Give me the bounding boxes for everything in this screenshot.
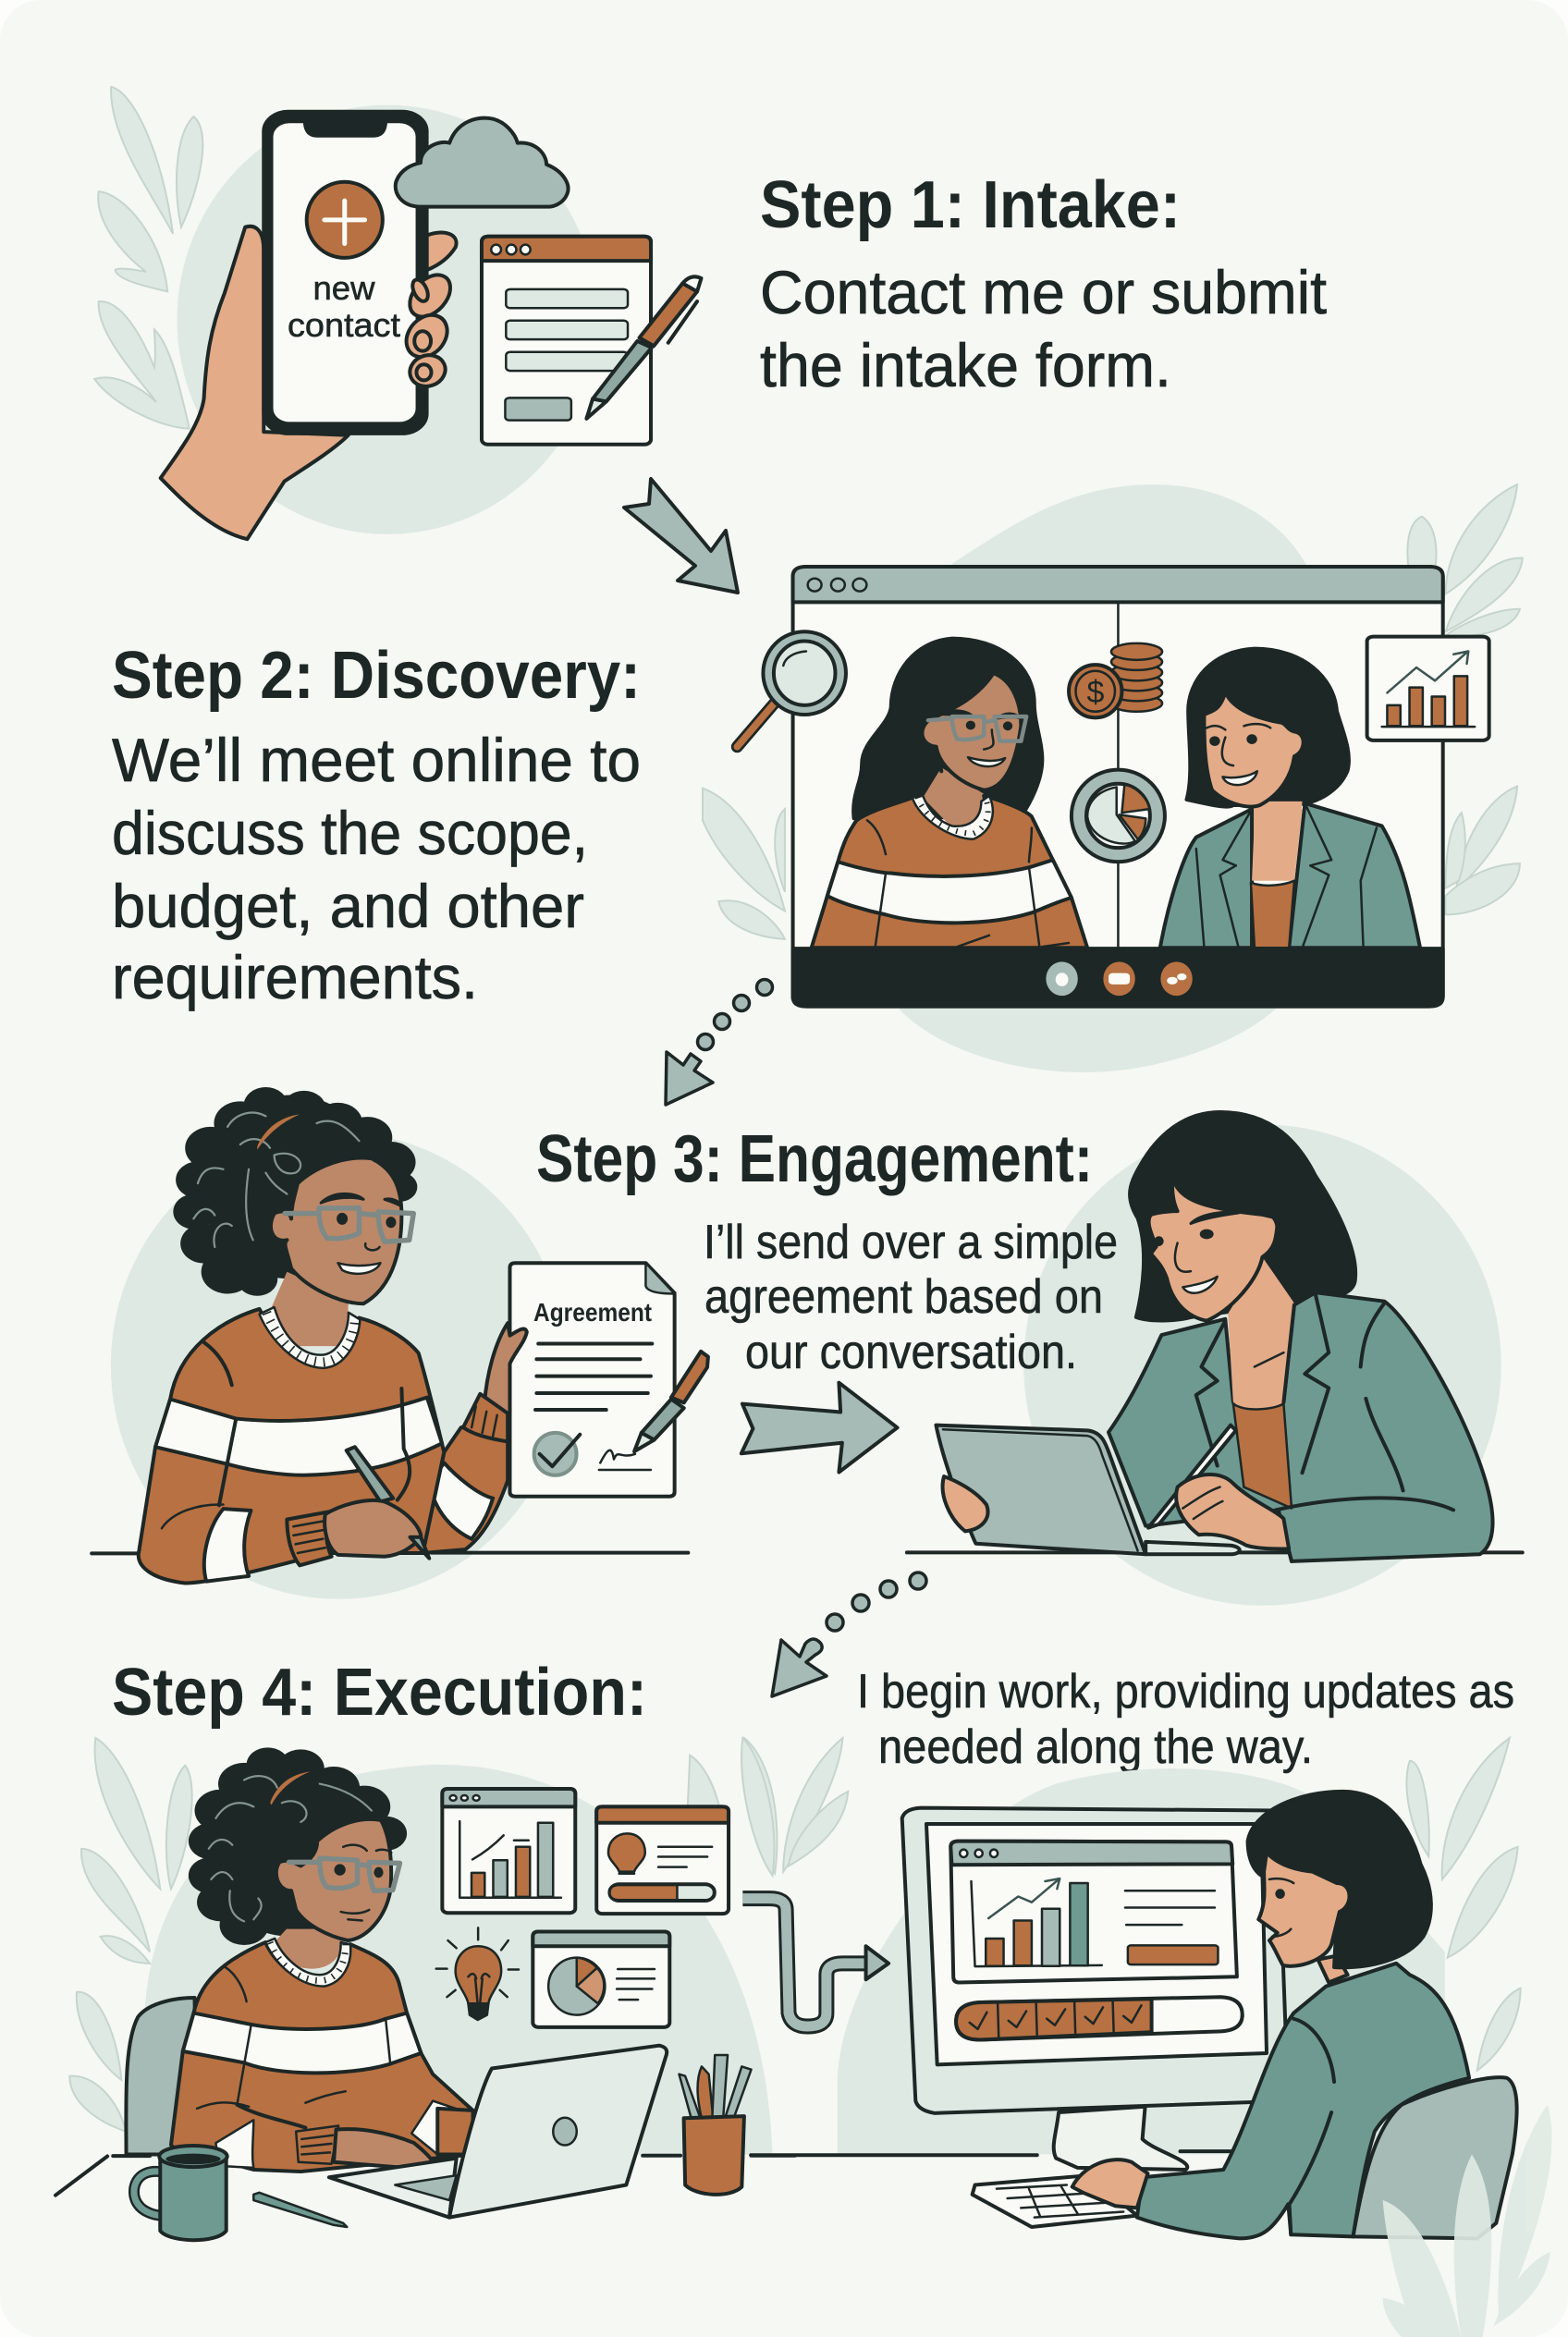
leaves: step 1: [94, 87, 202, 429]
leaves: step 2: [703, 484, 1523, 939]
label: new contact: contact: [288, 306, 400, 344]
text: step 3: agreement based on: [704, 1270, 1103, 1324]
card: bar chart window: [442, 1789, 575, 1913]
arrow: step 3 hand-off: [741, 1383, 898, 1472]
text: step 3: Step 3: Engagement:: [536, 1122, 1093, 1196]
label: new contact: new: [312, 269, 376, 307]
icon: pen on desk: [253, 2193, 347, 2227]
foreground leaves: [1383, 2105, 1551, 2337]
chair: [126, 1998, 197, 2154]
person: consultant at monitor: [1072, 1792, 1469, 2238]
panel: step 4 right illustration: [741, 1738, 1551, 2337]
text: step 4: I begin work, providing updates as: [857, 1665, 1514, 1719]
icon: growth chart card: [1367, 637, 1489, 740]
writing hand and pen: [325, 1447, 429, 1559]
text: step 2: discuss the scope,: [112, 799, 588, 867]
arrow: step 1 to step 2: [624, 479, 738, 593]
text: step 4: needed along the way.: [878, 1720, 1313, 1774]
icon: agreement document: [509, 1263, 675, 1497]
panel: step 2 illustration: [703, 484, 1523, 1072]
arrow: dotted step 3 to step 4: [772, 1572, 926, 1696]
text: step 1: [760, 168, 1327, 399]
text: step 2: budget, and other: [112, 872, 584, 940]
person: client with curly hair: [139, 1087, 508, 1583]
person: client on video: [812, 639, 1087, 948]
text: step 2: Step 2: Discovery:: [112, 639, 641, 713]
panel: step 1 illustration: [94, 87, 701, 539]
torso: [139, 1309, 444, 1583]
text: step 2: requirements.: [112, 943, 478, 1011]
leaves: step 4 right: [741, 1738, 1521, 2071]
icon: light bulb: [436, 1927, 519, 2020]
card: pie chart window: [533, 1932, 669, 2027]
leaves: step 4 left: [69, 1738, 777, 2132]
text: step 4: [112, 1656, 1514, 1774]
icon: coins: [1069, 643, 1162, 717]
icon: keyboard: [973, 2175, 1137, 2227]
icon: cloud: [396, 118, 569, 207]
panel: step 3 left illustration: [92, 1087, 708, 1599]
person: consultant with tablet: [1109, 1112, 1493, 1561]
sleeve cuff: [463, 1394, 508, 1441]
icon: laptop: [329, 2046, 667, 2218]
icon: pie chart: [1072, 770, 1165, 862]
icon: monitor: [902, 1808, 1288, 2170]
right arm: [423, 1413, 508, 1553]
icon: pencil cup: [679, 2055, 752, 2195]
arrow: dotted step 2 to step 3: [666, 980, 773, 1105]
label: agreement: Agreement: [533, 1298, 652, 1327]
icon: pen: [586, 276, 701, 419]
label: new contact: [288, 269, 400, 344]
text: step 1: Step 1: Intake:: [760, 168, 1181, 242]
text: step 3: our conversation.: [745, 1326, 1077, 1379]
panel: step 4 left illustration: [55, 1738, 795, 2240]
chair: [1353, 2077, 1517, 2238]
icon: hand holding phone: [161, 112, 459, 539]
icon: stylus and hand: [1148, 1425, 1289, 1549]
panel: step 3 right illustration: [741, 1112, 1523, 1606]
icon: dollar sign: $: [1087, 675, 1105, 710]
text: step 4: Step 4: Execution:: [112, 1656, 647, 1730]
video call window: [793, 567, 1443, 1007]
raised hand: [484, 1323, 527, 1413]
icon: intake form window: [482, 237, 651, 445]
icon: tablet: [936, 1425, 1240, 1554]
card: idea window: [596, 1806, 729, 1914]
text: step 3: I’ll send over a simple: [704, 1216, 1118, 1269]
icon: coffee mug: [134, 2146, 227, 2240]
person: client at laptop: [171, 1747, 473, 2172]
text: step 2: [112, 639, 641, 1011]
text: step 3: [536, 1122, 1118, 1379]
icon: magnifying glass: [737, 631, 846, 747]
icon: signing pen on document: [634, 1352, 708, 1451]
text: step 1: the intake form.: [760, 331, 1171, 399]
arrow: connector: [742, 1899, 888, 2026]
person: consultant on video: [1160, 649, 1420, 948]
text: step 2: We’ll meet online to: [112, 726, 641, 794]
text: step 1: Contact me or submit: [760, 258, 1327, 326]
